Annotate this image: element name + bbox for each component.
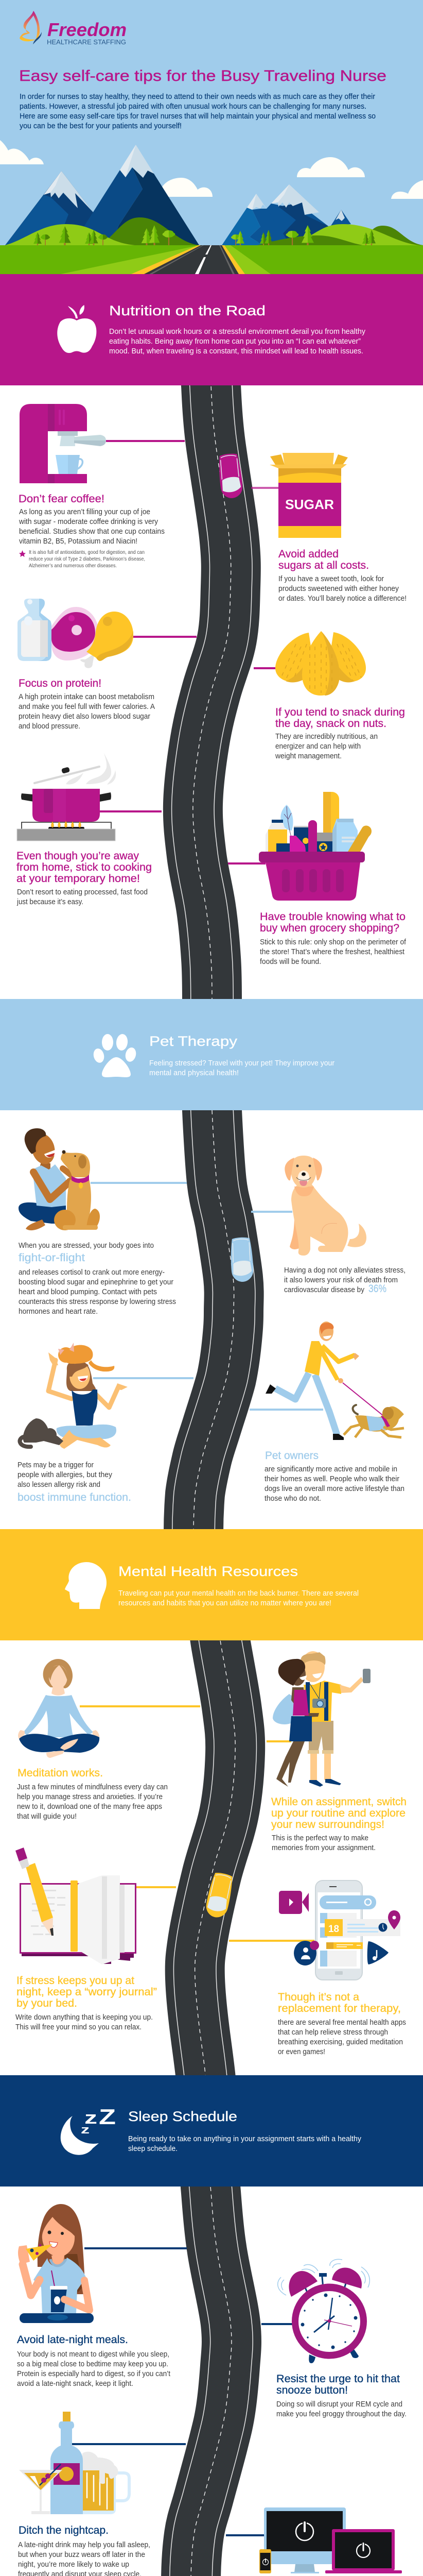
- text: meditation works: Just a few minutes of mindfulness every day can: [17, 1783, 168, 1791]
- text: grocery shopping: the store! That’s where the freshest, healthiest: [260, 947, 405, 956]
- text: Don't fear coffee: Don’t fear coffee!: [19, 493, 104, 505]
- road: pet therapy segment: [193, 1103, 234, 1540]
- text: focus on protein: protein heavy diet also lowers blood sugar: [19, 712, 150, 721]
- text: fight-or-flight: counteracts this stress response by lowering stress: [19, 1297, 176, 1306]
- text: pets and allergies: also lessen allergy risk and: [17, 1480, 100, 1489]
- text: cook at home: just because it’s easy.: [16, 897, 83, 906]
- text: cook at home: Even though you’re away: [16, 850, 139, 862]
- text: fight-or-flight: boosting blood sugar and epinephrine to get your: [19, 1278, 173, 1286]
- text: avoid added sugars: [278, 548, 407, 603]
- text: explore surroundings: up your routine and explore: [271, 1807, 406, 1819]
- text: pets and allergies: [17, 1461, 131, 1503]
- text: dog lowers risk: cardiovascular disease by: [284, 1285, 364, 1294]
- text: Don't fear coffee: vitamin B2, B5, Potassium and Niacin!: [19, 537, 137, 546]
- text: fight-or-flight: [19, 1241, 176, 1316]
- text: meditation works: help you manage stress and anxieties. If you’re: [17, 1792, 163, 1801]
- illustration: alcoholic drinks: [19, 2412, 129, 2514]
- text: focus on protein: and blood pressure.: [19, 722, 80, 731]
- text: grocery shopping: [260, 911, 407, 966]
- icon: apple: [57, 305, 96, 353]
- text: late-night meals: avoid a late-night snack, keep it light.: [17, 2379, 133, 2388]
- icon: milk, meat and drumstick: [17, 599, 133, 668]
- intro text: [109, 327, 365, 355]
- illustration: phone with app icons: [279, 1880, 400, 1980]
- text: grocery shopping: buy when grocery shopping?: [260, 922, 399, 934]
- heading: Pet Therapy: [149, 1033, 238, 1049]
- icon: moon and zzz: Z: [99, 2105, 116, 2129]
- intro text: resources and habits that you can utilize no matter where you are!: [118, 1599, 331, 1607]
- intro text: you can be the best for your patients and yourself!: [20, 122, 182, 130]
- text: ditch the nightcap: but when your buzz wears off later in the: [18, 2550, 145, 2559]
- text: pets and allergies: boost immune function.: [17, 1492, 131, 1503]
- text: meditation works: [17, 1767, 168, 1821]
- note with star: reduce your risk of Type 2 diabetes, Parkinson’s disease,: [29, 556, 145, 562]
- panel: Nutrition on the Road banner: [0, 274, 423, 385]
- text: pet owners: are significantly more active and mobile in: [265, 1465, 397, 1473]
- text: dog lowers risk: Having a dog not only alleviates stress,: [284, 1266, 406, 1275]
- text: mental health apps: breathing exercising, guided meditation: [278, 2038, 403, 2046]
- text: fight-or-flight: hormones and heart rate.: [19, 1307, 98, 1316]
- text: worry journal: If stress keeps you up at: [16, 1975, 134, 1987]
- text: dog lowers risk: [284, 1266, 406, 1295]
- text: ditch the nightcap: night, you’re more likely to wake up: [18, 2560, 129, 2569]
- illustration: man running with dog: [266, 1321, 404, 1440]
- trees: [33, 225, 376, 245]
- text: mental health apps: replacement for therapy,: [278, 2003, 401, 2014]
- text: focus on protein: Focus on protein!: [19, 677, 101, 689]
- note with star: [19, 549, 145, 569]
- text: mental health apps: or even games!: [278, 2047, 325, 2056]
- text: focus on protein: and make you feel full with fewer calories. A: [19, 702, 155, 711]
- text: late-night meals: Avoid late-night meals.: [17, 2334, 128, 2346]
- text: snooze button: [276, 2373, 407, 2418]
- text: Don't fear coffee: beneficial. Studies show that one cup contains: [19, 527, 165, 536]
- icon: alarm clock: [278, 2259, 369, 2363]
- heading: Sleep Schedule: [128, 2109, 237, 2124]
- text: cook at home: Don’t resort to eating processed, fast food: [17, 888, 148, 896]
- text: meditation works: Meditation works.: [17, 1767, 103, 1779]
- text: pets and allergies: Pets may be a trigger for: [17, 1461, 94, 1469]
- icon: yellow car: [204, 1871, 235, 1920]
- text: focus on protein: [19, 677, 155, 731]
- icon: pencil: [15, 1848, 54, 1936]
- text: snack on nuts: energizer and can help with: [275, 742, 361, 751]
- text: pet owners: dogs live an overall more active lifestyle than: [265, 1484, 404, 1493]
- text: avoid added sugars: products sweetened with either honey: [278, 584, 399, 593]
- intro text: Being ready to take on anything in your assignment starts with a healthy: [128, 2134, 361, 2143]
- intro text: sleep schedule.: [128, 2144, 178, 2153]
- icon: paw: [92, 1033, 137, 1077]
- intro text: [128, 2134, 361, 2153]
- text: avoid added sugars: sugars at all costs.: [278, 560, 369, 571]
- icon: moon and zzz: z: [84, 2108, 97, 2128]
- illustration: couple taking a selfie: [273, 1651, 371, 1787]
- hills: [5, 217, 423, 245]
- icon: almonds: [275, 631, 366, 696]
- intro text: [20, 92, 376, 130]
- text: snack on nuts: weight management.: [275, 752, 342, 760]
- text: explore surroundings: This is the perfect way to make: [272, 1834, 368, 1842]
- text: meditation works: new to it, download one of the many free apps: [17, 1802, 162, 1811]
- text: snack on nuts: If you tend to snack during: [275, 706, 405, 718]
- text: explore surroundings: While on assignment, switch: [271, 1796, 407, 1808]
- text: cook at home: at your temporary home!: [16, 873, 140, 885]
- road: mental health segment: [195, 1633, 235, 2087]
- icon: moon and zzz: [61, 2105, 116, 2155]
- calendar date: 18: [328, 1924, 339, 1935]
- icon: sugar box: [270, 453, 348, 538]
- text: grocery shopping: Have trouble knowing what to: [260, 911, 406, 923]
- text: pet owners: those who do not.: [265, 1494, 321, 1503]
- text: focus on protein: A high protein intake can boost metabolism: [19, 692, 154, 701]
- intro text: eating habits. Being away from home can put you into an “I can eat whatever”: [109, 337, 361, 346]
- text: dog lowers risk: 36%: [368, 1283, 386, 1295]
- text: snooze button: make you feel groggy throughout the day.: [276, 2410, 407, 2418]
- text: ditch the nightcap: Ditch the nightcap.: [19, 2524, 109, 2536]
- text: avoid added sugars: If you have a sweet tooth, look for: [278, 574, 384, 583]
- heading: Nutrition on the Road: [109, 303, 266, 318]
- connectors: sleep: [72, 2247, 292, 2576]
- ground and road vanishing: [0, 245, 423, 274]
- text: late-night meals: Your body is not meant to digest while you sleep,: [17, 2350, 169, 2359]
- panel: Mental Health Resources banner: [0, 1529, 423, 1640]
- heading: Mental Health Resources: [118, 1564, 298, 1579]
- text: mental health apps: Though it’s not a: [278, 1991, 359, 2003]
- text: worry journal: Write down anything that is keeping you up.: [15, 2013, 153, 2022]
- intro text: mood. But, when traveling is a constant, this mindset will lead to health issues.: [109, 347, 363, 355]
- illustration: woman with cats: [20, 1343, 128, 1449]
- note with star: Alzheimer’s and numerous other diseases.: [29, 563, 117, 569]
- text: snooze button: Doing so will disrupt your REM cycle and: [276, 2400, 402, 2409]
- text: late-night meals: so a big meal close to bedtime may keep you up.: [17, 2360, 168, 2368]
- text: explore surroundings: [271, 1796, 407, 1852]
- icon: purple car: [217, 453, 244, 499]
- logo: Freedom Healthcare Staffing: HEALTHCARE STAFFING: [47, 39, 126, 46]
- text: snooze button: snooze button!: [276, 2384, 348, 2396]
- intro text: patients. However, a stressful job paired with often unusual work hours can be challenging for many nurses.: [20, 102, 366, 111]
- icon: head silhouette: [65, 1562, 107, 1609]
- text: pet owners: their homes as well. People who walk their: [265, 1475, 399, 1483]
- text: Don't fear coffee: with sugar - moderate coffee drinking is very: [19, 517, 158, 526]
- panel: Pet Therapy banner: [0, 999, 423, 1110]
- text: dog lowers risk: it also lowers your risk of death from: [284, 1276, 398, 1284]
- connectors: mental health: [80, 1705, 314, 1942]
- sugar label: SUGAR: [285, 497, 334, 512]
- text: late-night meals: [17, 2334, 171, 2388]
- text: avoid added sugars: or dates. You’ll barely notice a difference!: [278, 594, 407, 603]
- text: fight-or-flight: When you are stressed, your body goes into: [19, 1241, 154, 1250]
- text: cook at home: [16, 850, 152, 906]
- text: ditch the nightcap: [18, 2524, 150, 2576]
- text: worry journal: by your bed.: [16, 1997, 77, 2009]
- intro text: In order for nurses to stay healthy, they need to attend to their own needs with as much care as they offer their: [20, 92, 375, 101]
- road: sleep segment: [191, 2179, 232, 2576]
- text: mental health apps: that can help relieve stress through: [278, 2028, 388, 2037]
- text: fight-or-flight: fight-or-flight: [19, 1252, 85, 1264]
- mountains: [5, 145, 351, 245]
- text: explore surroundings: your new surroundings!: [271, 1819, 384, 1831]
- text: cook at home: from home, stick to cooking: [16, 861, 152, 873]
- illustration: sitting dog: [285, 1156, 366, 1256]
- connectors: pets: [91, 1182, 323, 1411]
- text: snooze button: Resist the urge to hit that: [276, 2373, 400, 2385]
- text: worry journal: This will free your mind so you can relax.: [15, 2023, 142, 2031]
- icon: cooking pot on stove: [17, 753, 116, 841]
- text: explore surroundings: memories from your assignment.: [272, 1843, 376, 1852]
- logo: Freedom Healthcare Staffing: Freedom: [47, 19, 127, 40]
- icon: grocery basket: [259, 792, 372, 901]
- text: fight-or-flight: and releases cortisol to crank out more energy-: [19, 1268, 165, 1277]
- illustration: journal and pencil: [15, 1848, 136, 1964]
- intro text: mental and physical health!: [149, 1069, 239, 1077]
- text: worry journal: night, keep a “worry journal”: [16, 1986, 157, 1998]
- intro text: [118, 1589, 359, 1607]
- intro text: Traveling can put your mental health on the back burner. There are several: [118, 1589, 359, 1598]
- logo: Freedom Healthcare Staffing: [20, 11, 127, 46]
- illustration: man hugging dog: [19, 1128, 100, 1230]
- illustration: woman eating pizza: [18, 2204, 94, 2323]
- panel: header landscape: [0, 0, 423, 274]
- text: pet owners: Pet owners: [265, 1450, 319, 1462]
- text: snack on nuts: They are incredibly nutritious, an: [275, 732, 378, 741]
- note with star: It is also full of antioxidants, good for digestion, and can: [29, 549, 145, 555]
- intro text: [149, 1059, 334, 1077]
- text: pets and allergies: people with allergies, but they: [17, 1470, 112, 1479]
- icon: coffee machine: [20, 404, 106, 483]
- title: Easy self-care tips for the Busy Traveling Nurse: [19, 67, 386, 84]
- connectors: nutrition: [100, 440, 278, 865]
- intro text: Here are some easy self-care tips for travel nurses that will help maintain your physical and mental wellness so: [20, 112, 376, 121]
- text: avoid added sugars: Avoid added: [278, 548, 339, 560]
- text: meditation works: that will guide you!: [17, 1812, 77, 1821]
- text: snack on nuts: [275, 706, 405, 760]
- intro text: Feeling stressed? Travel with your pet! They improve your: [149, 1059, 334, 1067]
- icon: blue car: [230, 1237, 254, 1282]
- text: grocery shopping: foods will be found.: [260, 957, 321, 966]
- text: late-night meals: Protein is especially hard to digest, so if you can’t: [17, 2369, 171, 2378]
- road: nutrition segment: [193, 379, 231, 1010]
- text: fight-or-flight: heart and blood pumping. Contact with pets: [19, 1287, 157, 1296]
- text: mental health apps: there are several free mental health apps: [278, 2018, 406, 2027]
- illustration: powered-down devices: [259, 2507, 402, 2573]
- text: pet owners: [265, 1450, 404, 1503]
- text: grocery shopping: Stick to this rule: only shop on the perimeter of: [260, 938, 407, 946]
- text: snack on nuts: the day, snack on nuts.: [275, 718, 386, 730]
- intro text: Don’t let unusual work hours or a stressful environment derail you from healthy: [109, 327, 365, 336]
- icon: moon and zzz: z: [81, 2123, 90, 2136]
- text: Don't fear coffee: [19, 493, 165, 546]
- text: mental health apps: [278, 1991, 406, 2056]
- panel: Sleep Schedule banner: [0, 2075, 423, 2187]
- clouds: [0, 140, 423, 199]
- text: worry journal: [15, 1975, 157, 2031]
- text: Don't fear coffee: As long as you aren’t filling your cup of joe: [19, 507, 150, 516]
- text: ditch the nightcap: A late-night drink may help you fall asleep,: [18, 2540, 150, 2549]
- illustration: meditating woman: [18, 1659, 99, 1758]
